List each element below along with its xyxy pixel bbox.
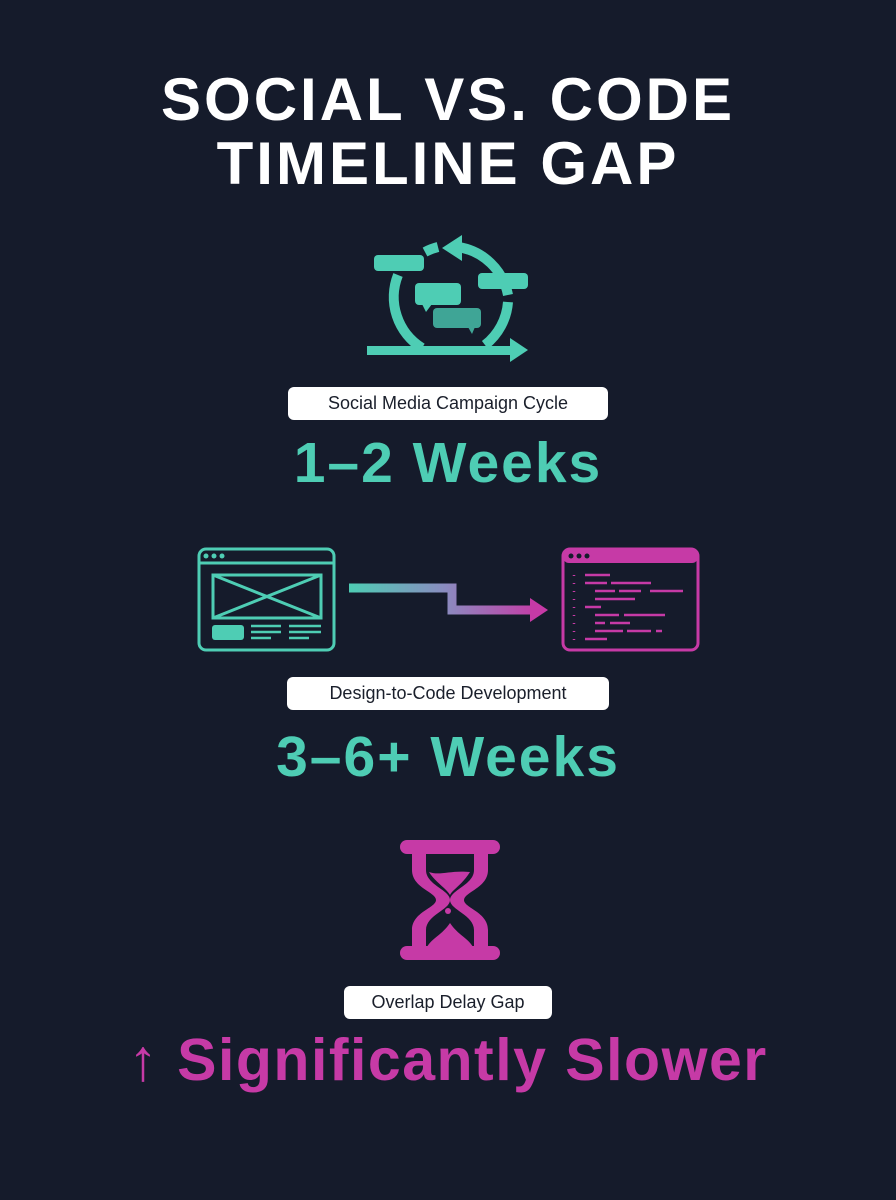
label: social media [288, 387, 608, 420]
icon: design to code [198, 548, 700, 652]
value: 3-6+ weeks: 3–6+ Weeks [276, 725, 620, 789]
icon: campaign cycle [367, 235, 528, 362]
label: overlap delay: Overlap Delay Gap [371, 992, 525, 1012]
label: social media: Social Media Campaign Cycle [328, 393, 568, 413]
title: TIMELINE GAP [217, 130, 679, 197]
label: design to code [287, 677, 609, 710]
value: 1-2 weeks: 1–2 Weeks [294, 431, 602, 495]
icon: hourglass [400, 840, 500, 960]
label: overlap delay [344, 986, 552, 1019]
label: design to code: Design-to-Code Development [329, 683, 567, 703]
title [161, 66, 735, 197]
title: SOCIAL VS. CODE [161, 66, 735, 133]
value: significantly slower: ↑ Significantly Slower [128, 1027, 768, 1093]
